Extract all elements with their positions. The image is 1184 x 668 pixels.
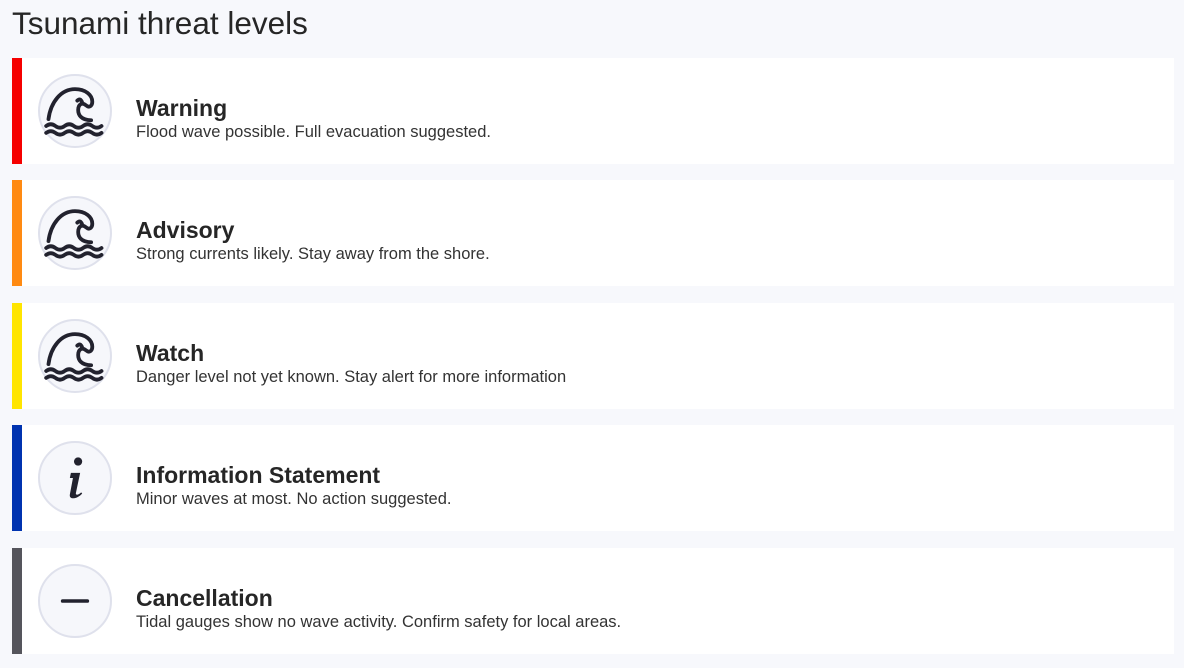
title: Tsunami threat levels — [12, 5, 308, 41]
icon: wave — [38, 196, 112, 270]
icon: dash — [38, 564, 112, 638]
heading: Watch — [136, 340, 204, 366]
icon: wave — [38, 74, 112, 148]
icon: wave — [38, 319, 112, 393]
text: Tidal gauges show no wave activity. Confirm safety for local areas. — [136, 613, 621, 631]
text: Minor waves at most. No action suggested. — [136, 490, 451, 508]
heading: Warning — [136, 95, 227, 121]
panel: cancellation — [12, 548, 1174, 654]
panel: watch — [12, 303, 1174, 409]
text: Strong currents likely. Stay away from the shore. — [136, 245, 490, 263]
heading: Information Statement — [136, 462, 380, 488]
panel: warning — [12, 58, 1174, 164]
heading: Advisory — [136, 217, 234, 243]
icon: info — [38, 441, 112, 515]
text: Danger level not yet known. Stay alert for more information — [136, 368, 566, 386]
panel: advisory — [12, 180, 1174, 286]
heading: Cancellation — [136, 585, 273, 611]
panel: information statement — [12, 425, 1174, 531]
text: Flood wave possible. Full evacuation suggested. — [136, 123, 491, 141]
